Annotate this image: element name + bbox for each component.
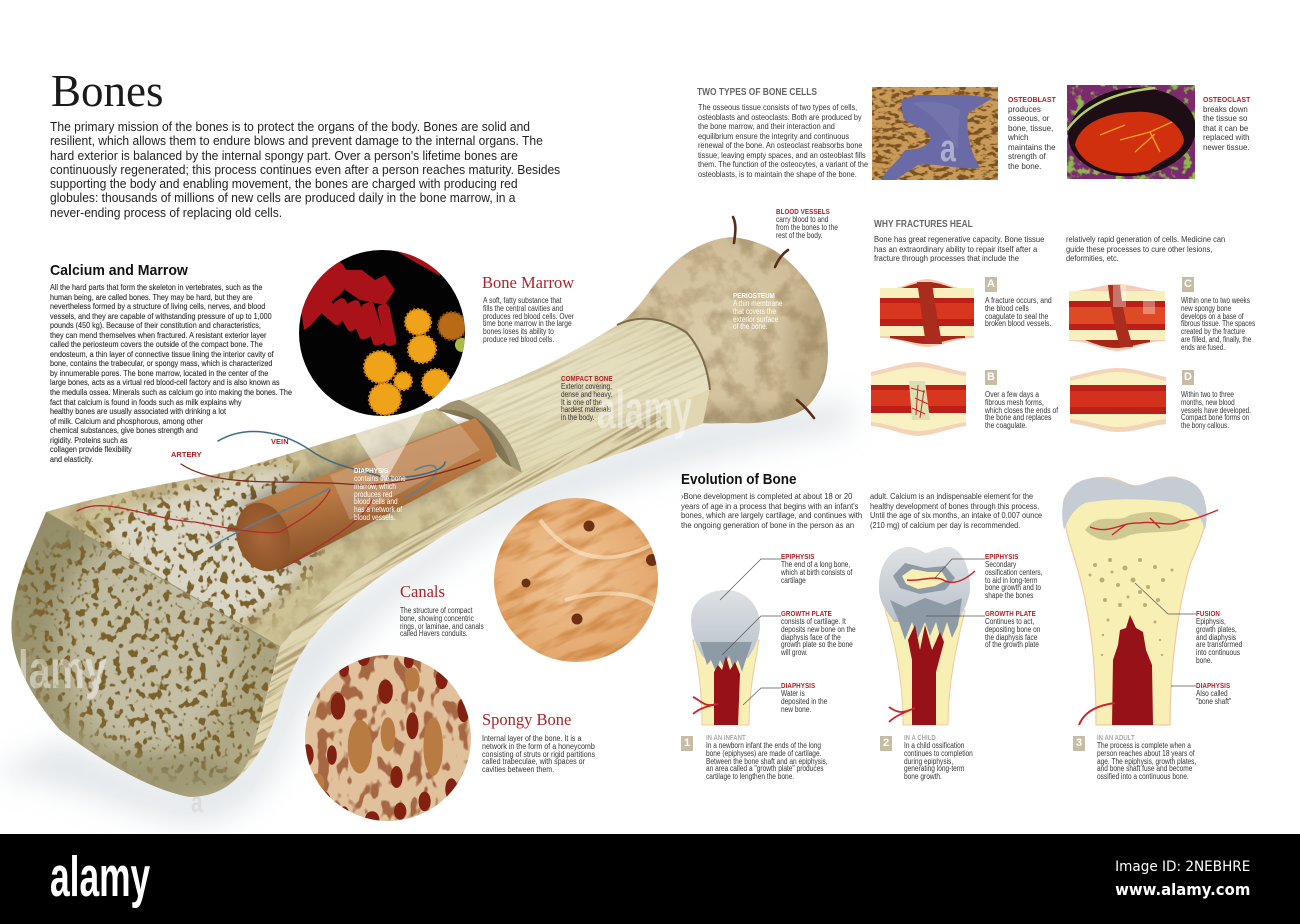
label: child epiphysis: shape the bones	[985, 591, 1033, 600]
main bone illustration	[0, 217, 850, 916]
label: infant growth plate	[781, 609, 856, 657]
label: blood vessels: carry blood to and	[776, 215, 828, 224]
label: compact bone: dense and heavy.	[561, 390, 612, 399]
label: vein: VEIN	[271, 437, 289, 446]
badge 1	[681, 736, 693, 751]
label: child epiphysis: Secondary	[985, 560, 1016, 569]
label: child growth plate: of the growth plate	[985, 640, 1039, 649]
text: evolution column 1: the ongoing generation of bone in the person as an	[681, 520, 854, 530]
fracture diagram D	[1070, 368, 1166, 432]
label: fusion: into continuous	[1196, 648, 1240, 657]
text: bone cells: osteoblasts and osteoclasts. Both are produced by	[698, 112, 862, 122]
text: step A: broken blood vessels.	[985, 319, 1051, 328]
fracture diagram A	[880, 279, 974, 347]
text: bone marrow: produce red blood cells.	[483, 335, 554, 344]
text: in a child: generating long-term	[904, 764, 964, 773]
text: in an adult: age. The epiphysis, growth plates,	[1097, 757, 1196, 766]
label: diaphysis: blood cells and	[354, 497, 398, 506]
label: osteoclast: OSTEOCLAST	[1203, 95, 1250, 104]
badge A: A	[987, 278, 995, 290]
label: fusion: bone.	[1196, 656, 1212, 665]
text: in an adult	[1097, 733, 1196, 781]
compact bone half cylinder	[460, 320, 709, 473]
label: compact bone: It is one of the	[561, 398, 602, 407]
label: infant diaphysis: deposited in the	[781, 697, 827, 706]
badge A	[985, 277, 997, 292]
label: osteoclast: newer tissue.	[1203, 142, 1250, 152]
text: bone marrow: fills the central cavities and	[483, 304, 563, 313]
text: calcium and marrow: rigidity. Proteins such as	[50, 435, 128, 445]
fracture diagram B	[871, 362, 966, 436]
label: infant epiphysis: cartilage	[781, 576, 806, 585]
badge C	[1182, 277, 1194, 292]
label: child epiphysis: EPIPHYSIS	[985, 552, 1019, 561]
text: fractures column 2	[1066, 234, 1225, 263]
text: evolution column 1: years of age in a process that begins with an infant's	[681, 501, 858, 511]
cut surface of the shaft	[46, 408, 522, 647]
label: fusion	[1196, 609, 1242, 665]
label: infant diaphysis: Water is	[781, 689, 805, 698]
text: bone marrow: time bone marrow in the large	[483, 319, 572, 328]
label: infant epiphysis: The end of a long bone,	[781, 560, 850, 569]
text: bone marrow	[483, 296, 574, 344]
label: fusion: FUSION	[1196, 609, 1220, 618]
text: calcium and marrow: by innumerable pores. The bone marrow, located in the center of the	[50, 368, 268, 378]
text: step C: develops on a base of	[1181, 312, 1244, 321]
text: calcium and marrow: human being, are called bones. They may be hard, but they are	[50, 292, 253, 302]
text: canals: The structure of compact	[400, 606, 472, 615]
text: calcium and marrow: and elasticity.	[50, 454, 93, 464]
label: osteoblast: OSTEOBLAST	[1008, 95, 1056, 104]
label: diaphysis: contains the bone	[354, 474, 406, 483]
heading: canals: Canals	[400, 582, 445, 601]
badge B: B	[987, 371, 995, 383]
label: osteoclast: that it can be	[1203, 123, 1248, 133]
label: infant diaphysis: new bone.	[781, 705, 811, 714]
heading: evolution of bone: Evolution of Bone	[681, 471, 796, 488]
text: in an adult: The process is complete when a	[1097, 741, 1191, 750]
text: bone cells: the bone marrow, and their interaction and	[698, 121, 835, 131]
watermark center: alamy	[597, 380, 692, 440]
badge D	[1182, 370, 1194, 385]
label: osteoblast	[1008, 95, 1056, 171]
label: infant epiphysis: EPIPHYSIS	[781, 552, 815, 561]
diaphysis marrow cylinder	[227, 418, 497, 578]
label: compact bone: Exterior covering,	[561, 382, 612, 391]
label: fusion: and diaphysis	[1196, 633, 1236, 642]
icon: blood vessels on periosteum	[733, 217, 814, 418]
text: step B: Over a few days a	[985, 390, 1039, 399]
image: osteoclast micrograph	[1067, 85, 1195, 179]
label: periosteum: exterior surface	[733, 315, 778, 324]
text: spongy bone	[482, 734, 595, 774]
heading: spongy bone: Spongy Bone	[482, 710, 571, 729]
text: evolution column 2: Until the age of six months, an intake of 0.007 ounce	[870, 510, 1042, 520]
label: child epiphysis	[985, 552, 1043, 600]
label: child epiphysis: ossification centers,	[985, 568, 1043, 577]
text: spongy bone: cavities between them.	[482, 765, 554, 774]
label: child epiphysis: to aid in long-term	[985, 576, 1037, 585]
label: osteoblast: strength of	[1008, 151, 1046, 161]
label: child growth plate: Continues to act,	[985, 617, 1034, 626]
bone head with periosteum	[620, 237, 828, 424]
intro text	[50, 119, 560, 220]
heading: bone marrow: Bone Marrow	[482, 273, 574, 292]
label: infant diaphysis: DIAPHYSIS	[781, 681, 815, 690]
label: periosteum: PERIOSTEUM	[733, 291, 775, 300]
label: infant growth plate: GROWTH PLATE	[781, 609, 832, 618]
intro text: never-ending process of replacing old cells.	[50, 205, 282, 220]
text: step A	[985, 296, 1052, 328]
text: spongy bone: called trabeculae, with spaces or	[482, 757, 585, 766]
intro text: supporting the body and enabling movement, the bones are charged with producing red	[50, 176, 518, 191]
label: osteoclast: replaced with	[1203, 132, 1250, 142]
badge C: C	[1184, 278, 1192, 290]
label: infant epiphysis: which at birth consists of	[781, 568, 852, 577]
text: step C: fibrous tissue. The spaces	[1181, 319, 1255, 328]
text: evolution column 2: (210 mg) of calcium per day is recommended.	[870, 520, 1020, 530]
label: infant growth plate: deposits new bone on the	[781, 625, 856, 634]
text: canals	[400, 606, 484, 638]
label: fusion: growth plates,	[1196, 625, 1237, 634]
text: bone cells: them. The function of the osteocytes, a variant of the	[698, 159, 868, 169]
text: spongy bone: network in the form of a honeycomb	[482, 742, 595, 751]
text: calcium and marrow: bone, contains the trabecular, or spongy mass, which is characterized	[50, 358, 272, 368]
text: in an infant: IN AN INFANT	[706, 733, 746, 742]
text: bone marrow: A soft, fatty substance that	[483, 296, 562, 305]
label: osteoblast: osseous, or	[1008, 113, 1049, 123]
text: step D: the bony callous.	[1181, 421, 1229, 430]
label: adult diaphysis: Also called	[1196, 689, 1228, 698]
text: fractures column 1	[874, 234, 1044, 263]
label: infant growth plate: diaphysis face of the	[781, 633, 841, 642]
text: step C	[1181, 296, 1255, 352]
text: in an infant: Between the bone shaft and an epiphysis,	[706, 757, 828, 766]
text: step B: the coagulate.	[985, 421, 1027, 430]
label: osteoblast: which	[1008, 132, 1028, 142]
text: step D: vessels have developed.	[1181, 406, 1251, 415]
label: fusion: Epiphysis,	[1196, 617, 1226, 626]
label: adult diaphysis: "bone shaft"	[1196, 697, 1231, 706]
label: adult diaphysis	[1196, 681, 1231, 706]
label: blood vessels: from the bones to the	[776, 223, 838, 232]
text: step B: the bone and replaces	[985, 413, 1051, 422]
label: periosteum: A thin membrane	[733, 299, 783, 308]
text: fractures column 1: fracture through processes that include the	[874, 253, 1019, 263]
text: step C: new spongy bone	[1181, 304, 1231, 313]
text: step D: Within two to three	[1181, 390, 1234, 399]
badge 3: 3	[1076, 737, 1082, 749]
footer url: www.alamy.com	[1115, 880, 1250, 899]
text: step A: A fracture occurs, and	[985, 296, 1052, 305]
text: spongy bone: consisting of struts or rigid partitions	[482, 750, 595, 759]
text: calcium and marrow: they can mend themselves when fractured. A resistant exterior layer	[50, 330, 266, 340]
text: bone cells: The osseous tissue consists of two types of cells,	[698, 102, 857, 112]
label: osteoblast: maintains the	[1008, 142, 1056, 152]
label: infant growth plate: growth plate so the bone	[781, 640, 853, 649]
text: in an adult: and bone shaft fuse and become	[1097, 764, 1192, 773]
growth diagram: child bone	[879, 547, 985, 725]
text: step D: Compact bone forms on	[1181, 413, 1249, 422]
label: compact bone: COMPACT BONE	[561, 374, 613, 383]
footer bar	[0, 834, 1300, 924]
text: in an infant: an area called a "growth plate" produces	[706, 764, 824, 773]
text: in a child	[904, 733, 973, 781]
badge D: D	[1184, 371, 1192, 383]
label: child growth plate	[985, 609, 1040, 649]
label: osteoblast: produces	[1008, 104, 1041, 114]
label: osteoclast	[1203, 95, 1250, 152]
badge 2	[880, 736, 892, 751]
text: calcium and marrow: nevertheless formed by a structure of living cells, nerves, and blood	[50, 301, 265, 311]
text: calcium and marrow: the medulla ossea. Minerals such as calcium go into making the bones. The	[50, 387, 292, 397]
text: step D	[1181, 390, 1251, 430]
label: compact bone: in the body.	[561, 413, 594, 422]
text: step A: coagulate to seal the	[985, 312, 1048, 321]
text: fractures column 2: guide these processes to cure other lesions,	[1066, 244, 1212, 254]
label: infant diaphysis	[781, 681, 827, 714]
badge 1: 1	[684, 737, 690, 749]
text: fractures column 1: has an extraordinary ability to repair itself after a	[874, 244, 1037, 254]
text: fractures column 2: deformities, etc.	[1066, 253, 1119, 263]
footer image id: Image ID: 2NEBHRE	[1115, 859, 1250, 875]
label: osteoblast: bone, tissue,	[1008, 123, 1053, 133]
intro text: The primary mission of the bones is to protect the organs of the body. Bones are solid and	[50, 119, 530, 134]
image: osteoblast micrograph	[872, 87, 998, 182]
label: periosteum: of the bone.	[733, 322, 768, 331]
text: in an infant: In a newborn infant the ends of the long	[706, 741, 821, 750]
text: in an adult: IN AN ADULT	[1097, 733, 1135, 742]
outer striated shaft strip	[196, 390, 710, 797]
text: bone cells: equilibrium ensure the integrity and continuous	[698, 131, 849, 141]
text: canals: bone, showing concentric	[400, 614, 474, 623]
text: in an adult: ossified into a continuous bone.	[1097, 772, 1189, 781]
text: evolution column 2: healthy development of bones through this process.	[870, 501, 1039, 511]
label: compact bone: hardest materials	[561, 405, 611, 414]
text: calcium and marrow: vessels, and they are capable of withstanding pressure of up to 1,000	[50, 311, 272, 321]
label: diaphysis: marrow, which	[354, 482, 396, 491]
label: osteoclast: the tissue so	[1203, 113, 1247, 123]
growth diagram: adult bone	[1062, 477, 1218, 725]
text: bone cells: renewal of the bone. An osteoclast reabsorbs bone	[698, 140, 862, 150]
label: child growth plate: GROWTH PLATE	[985, 609, 1036, 618]
label: osteoclast: breaks down	[1203, 104, 1248, 114]
text: bone marrow: bones loses its ability to	[483, 327, 554, 336]
spongy bone cut face	[11, 512, 280, 797]
label: periosteum: that covers the	[733, 307, 776, 316]
text: bone cells: tissue, leaving empty spaces, and an osteoblast fills	[698, 150, 866, 160]
label: diaphysis: has a network of	[354, 505, 402, 514]
panel: canals magnified circle	[494, 498, 658, 662]
text: step A: the blood cells	[985, 304, 1029, 313]
heading: two types of bone cells: TWO TYPES OF BONE CELLS	[697, 87, 817, 98]
text: evolution column 1: bones, which are largely cartilage, and continues with	[681, 510, 862, 520]
text: bone cells	[698, 102, 868, 179]
label: diaphysis: produces red	[354, 490, 392, 499]
text: fractures column 1: Bone has great regenerative capacity. Bone tissue	[874, 234, 1044, 244]
text: evolution column 1: ›Bone development is completed at about 18 or 20	[681, 491, 852, 501]
badge 3	[1073, 736, 1085, 751]
text: canals: rings, or laminae, and canals	[400, 622, 484, 631]
label: infant growth plate: consists of cartilage. It	[781, 617, 846, 626]
label: blood vessels	[776, 207, 838, 240]
text: evolution column 1	[681, 491, 862, 530]
text: in an infant: bone (epiphyses) are made of cartilage.	[706, 749, 821, 758]
label: infant epiphysis	[781, 552, 852, 585]
heading: calcium and marrow: Calcium and Marrow	[50, 262, 188, 279]
text: step C: Within one to two weeks	[1181, 296, 1250, 305]
text: spongy bone: Internal layer of the bone. It is a	[482, 734, 581, 743]
intro text: resilient, which allows them to endure blows and prevent damage to the internal organs. The	[50, 133, 543, 148]
heading: why fractures heal: WHY FRACTURES HEAL	[874, 219, 973, 230]
text: bone marrow: produces red blood cells. Over	[483, 312, 574, 321]
title: Bones	[51, 66, 164, 116]
text: step C: created by the fracture	[1181, 327, 1245, 336]
text: in a child: In a child ossification	[904, 741, 964, 750]
text: calcium and marrow: All the hard parts that form the skeleton in vertebrates, such as the	[50, 282, 262, 292]
text: evolution column 2	[870, 491, 1042, 530]
text: calcium and marrow: chemical substances, give bones strength and	[50, 425, 198, 435]
label: compact bone	[561, 374, 613, 422]
text: bone cells: osteoblasts, is to maintain the shape of the bone.	[698, 169, 857, 179]
growth diagram: infant bone	[691, 559, 781, 725]
label: child epiphysis: bone growth and to	[985, 583, 1041, 592]
watermark on osteoblast: a	[940, 128, 956, 170]
text: evolution column 2: adult. Calcium is an indispensable element for the	[870, 491, 1033, 501]
text: calcium and marrow: fact that calcium is found in foods such as milk explains why	[50, 397, 242, 407]
footer logo: alamy	[50, 845, 150, 909]
text: step B: fibrous mesh forms,	[985, 398, 1044, 407]
label: child growth plate: the diaphysis face	[985, 633, 1037, 642]
text: in an infant: cartilage to lengthen the bone.	[706, 772, 794, 781]
text: step C: ends are fused.	[1181, 343, 1225, 352]
text: step D: months, new blood	[1181, 398, 1235, 407]
badge B	[985, 370, 997, 385]
text: step C: are filled, and, finally, the	[1181, 335, 1251, 344]
panel: bone marrow magnified circle	[299, 250, 469, 482]
label: periosteum	[733, 291, 783, 331]
text: in an infant	[706, 733, 828, 781]
label: fusion: are transformed	[1196, 640, 1242, 649]
text: in a child: bone growth.	[904, 772, 942, 781]
text: calcium and marrow: healthy bones are usually associated with drinking a lot	[50, 406, 226, 416]
text: calcium and marrow: called the periosteum covers the outside of the compact bone. The	[50, 339, 263, 349]
text: calcium and marrow: endosteum, a thin layer of connective tissue lining the interior cavity of	[50, 349, 274, 359]
text: in a child: continues to completion	[904, 749, 973, 758]
artwork layer	[8, 85, 1218, 830]
text: calcium and marrow: pounds (450 kg). Because of their constitution and characteristics,	[50, 320, 261, 330]
intro text: continuously regenerated; this process continues even after a person reaches maturity. Besides	[50, 162, 560, 177]
label: blood vessels: BLOOD VESSELS	[776, 207, 830, 216]
label: child growth plate: depositing bone on	[985, 625, 1040, 634]
text: in a child: during epiphysis,	[904, 757, 953, 766]
label: diaphysis	[354, 466, 406, 522]
text: in a child: IN A CHILD	[904, 733, 936, 742]
watermark bottom: a	[191, 786, 203, 819]
label: diaphysis: DIAPHYSIS	[354, 466, 388, 475]
label: artery: ARTERY	[171, 450, 202, 459]
label: diaphysis: blood vessels.	[354, 513, 396, 522]
text: calcium and marrow	[50, 282, 292, 464]
text: in an adult: person reaches about 18 years of	[1097, 749, 1195, 758]
vein and artery	[77, 431, 480, 563]
label: blood vessels: rest of the body.	[776, 231, 822, 240]
text: fractures column 2: relatively rapid generation of cells. Medicine can	[1066, 234, 1225, 244]
label: osteoblast: the bone.	[1008, 161, 1041, 171]
text: calcium and marrow: large bones, acts as a virtual red blood-cell factory and is also known as	[50, 377, 280, 387]
panel: spongy bone magnified circle	[305, 655, 471, 821]
badge 2: 2	[883, 737, 889, 749]
text: step B	[985, 390, 1058, 430]
crescent wall inside compact bone	[437, 400, 522, 473]
text: calcium and marrow: of milk. Calcium and phosphorous, among other	[50, 416, 203, 426]
label: infant growth plate: will grow.	[781, 648, 808, 657]
text: canals: called Havers conduits.	[400, 629, 468, 638]
intro text: hard exterior is balanced by the internal spongy part. Over a person's lifetime bones are	[50, 148, 518, 163]
text: calcium and marrow: collagen provide flexibility	[50, 444, 132, 454]
watermark left: lamy	[18, 640, 107, 700]
fracture diagram C	[1069, 284, 1165, 351]
intro text: globules: thousands of millions of new cells are produced daily in the bone marrow, in a	[50, 190, 516, 205]
text: step B: which closes the ends of	[985, 406, 1058, 415]
label: adult diaphysis: DIAPHYSIS	[1196, 681, 1230, 690]
